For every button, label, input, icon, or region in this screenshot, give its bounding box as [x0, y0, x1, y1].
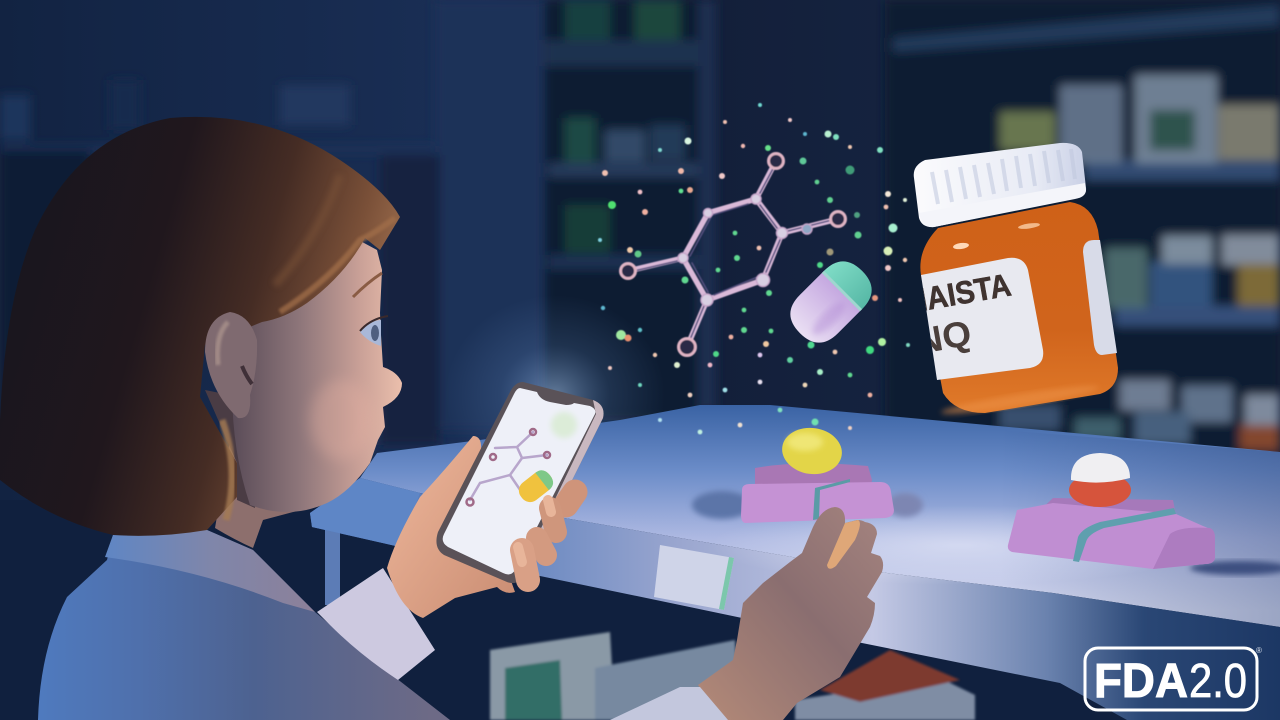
main label — [921, 258, 1044, 380]
phone screen capsule — [515, 467, 557, 506]
coat sleeve — [317, 568, 435, 680]
floating capsule — [781, 252, 881, 352]
main label: INQ — [902, 312, 974, 364]
eye — [360, 320, 381, 346]
woman: coat — [38, 529, 450, 720]
coat collar — [105, 529, 315, 612]
bottle body — [920, 202, 1118, 413]
raised hand and arm — [610, 507, 883, 720]
hand holding phone — [387, 436, 515, 618]
arm sleeve — [610, 687, 728, 720]
label text: MAISTA — [900, 267, 1014, 321]
counter front face — [310, 478, 1280, 720]
fingers over phone — [518, 492, 575, 580]
bottle cap — [914, 143, 1086, 227]
soft glow from phone — [445, 295, 665, 495]
red and white pill on pink block — [1008, 453, 1215, 569]
woman: ear — [205, 312, 257, 418]
phone — [436, 382, 604, 583]
boxes under counter — [490, 632, 975, 720]
molecule end atoms — [620, 154, 846, 356]
background: blurred pharmacy shelves — [0, 0, 1280, 480]
pill bottle — [900, 143, 1118, 418]
table leg — [325, 525, 340, 605]
woman: neck and face — [205, 230, 402, 548]
sparkle particles — [598, 103, 910, 434]
woman: hair — [0, 117, 400, 536]
white label on counter front — [654, 545, 734, 610]
phone screen molecule — [466, 429, 550, 506]
molecule model — [620, 154, 846, 356]
eyebrow — [353, 273, 382, 297]
counter top surface — [360, 405, 1280, 627]
orange finger — [827, 520, 860, 569]
logo: FDA 2.0 — [1085, 646, 1262, 710]
logo: FDA 2.0: 2.0 — [1189, 655, 1247, 708]
logo text: FDA — [1094, 655, 1188, 708]
counter — [310, 405, 1280, 720]
molecule joints — [678, 194, 812, 306]
yellow pill on pink block — [741, 424, 894, 523]
side label — [1083, 240, 1117, 355]
registered mark: ® — [1256, 646, 1262, 655]
dark space under the counter — [0, 500, 1280, 720]
